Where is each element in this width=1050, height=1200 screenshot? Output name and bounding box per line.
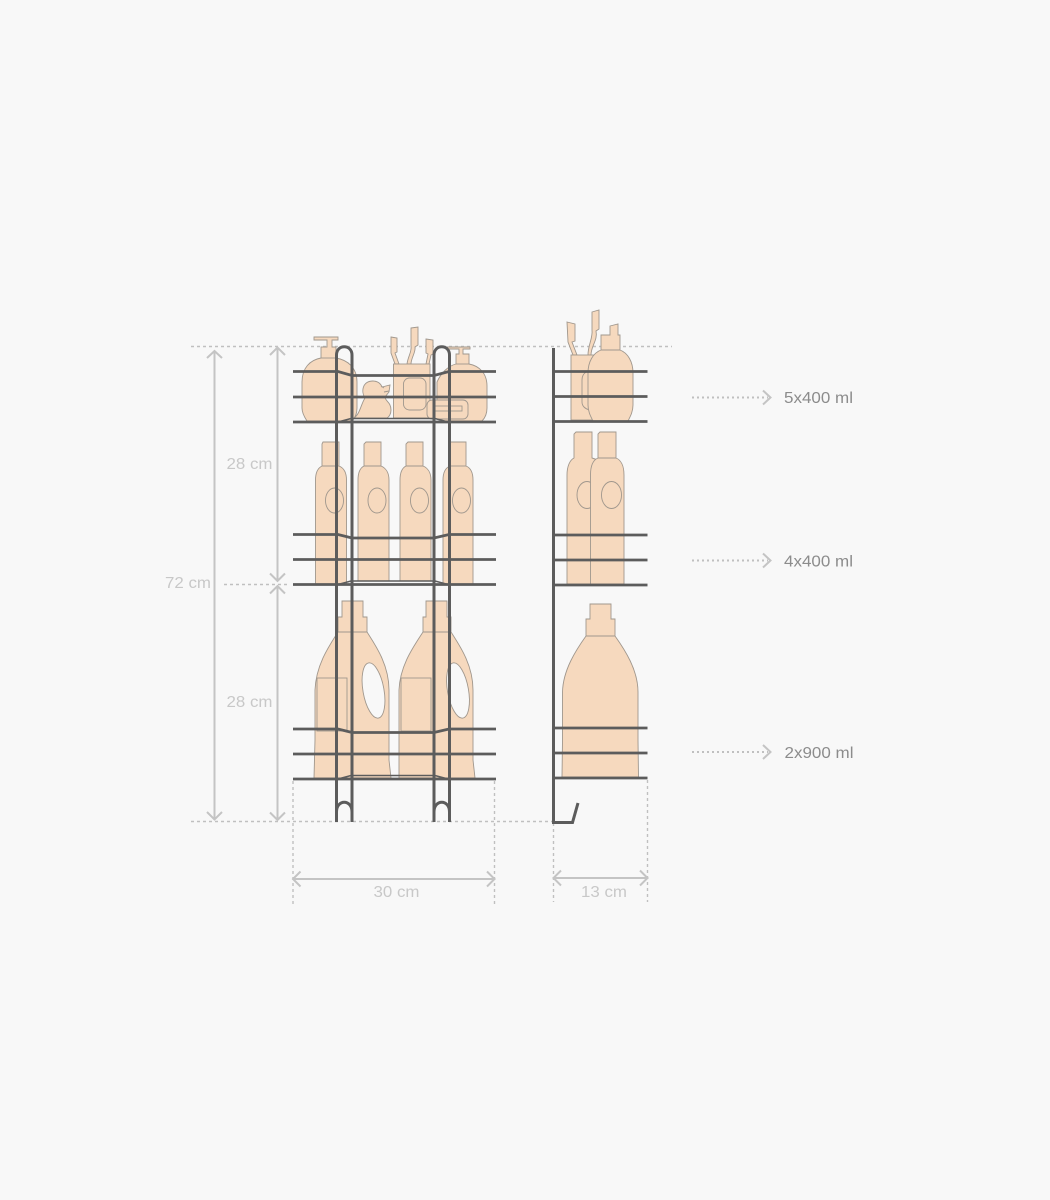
panel: front view rack	[293, 347, 496, 822]
dimension: lower 28 cm	[226, 586, 285, 820]
dimension: 72 cm overall height	[165, 351, 222, 820]
dimension: lower 28 cm: 28 cm	[226, 694, 272, 711]
dimension: upper 28 cm: 28 cm	[226, 456, 272, 473]
dimension: 13 cm depth: 13 cm	[581, 884, 627, 901]
callout: 4x400 ml: 4x400 ml	[784, 554, 853, 570]
callout: 2x900 ml: 2x900 ml	[784, 745, 854, 762]
icon: side 400 ml bottles	[567, 432, 624, 584]
dimension: 30 cm width: 30 cm	[374, 884, 420, 901]
icon: right 900 ml bottle	[399, 601, 475, 778]
dimension: 72 cm overall height: 72 cm	[165, 575, 211, 592]
icon: left soap pump	[302, 337, 357, 421]
dotted guide lines	[191, 346, 672, 904]
left frame rail	[336, 347, 352, 822]
side frame with hook	[554, 348, 578, 822]
panel: front view products	[302, 327, 487, 778]
icon: four 400 ml bottles	[316, 442, 473, 584]
dimension: 13 cm depth	[554, 870, 648, 901]
icon: right soap pump	[437, 347, 487, 421]
panel: side view products	[562, 310, 638, 777]
icon: toothbrush cup	[391, 327, 433, 418]
side shelf wires	[553, 372, 648, 778]
bottom shelf wires	[293, 729, 496, 779]
callout: 5x400 ml: 5x400 ml	[784, 390, 853, 407]
icon: side toothbrush cup	[567, 310, 601, 420]
panel: side view rack	[553, 348, 648, 822]
icon: soap dish	[427, 400, 468, 419]
dimension: upper 28 cm	[226, 348, 285, 581]
callout: 2x900 ml	[692, 745, 854, 762]
icon: side soap pump	[588, 324, 633, 421]
icon: rubber duck	[354, 381, 391, 418]
top shelf wires	[293, 372, 496, 422]
icon: left 900 ml bottle	[314, 601, 391, 778]
middle shelf wires	[293, 534, 496, 584]
callout: 4x400 ml	[692, 554, 853, 570]
dimension: 30 cm width	[293, 872, 494, 901]
callout: 5x400 ml	[692, 390, 853, 407]
right frame rail	[434, 347, 450, 822]
icon: side 900 ml bottle	[562, 604, 638, 777]
